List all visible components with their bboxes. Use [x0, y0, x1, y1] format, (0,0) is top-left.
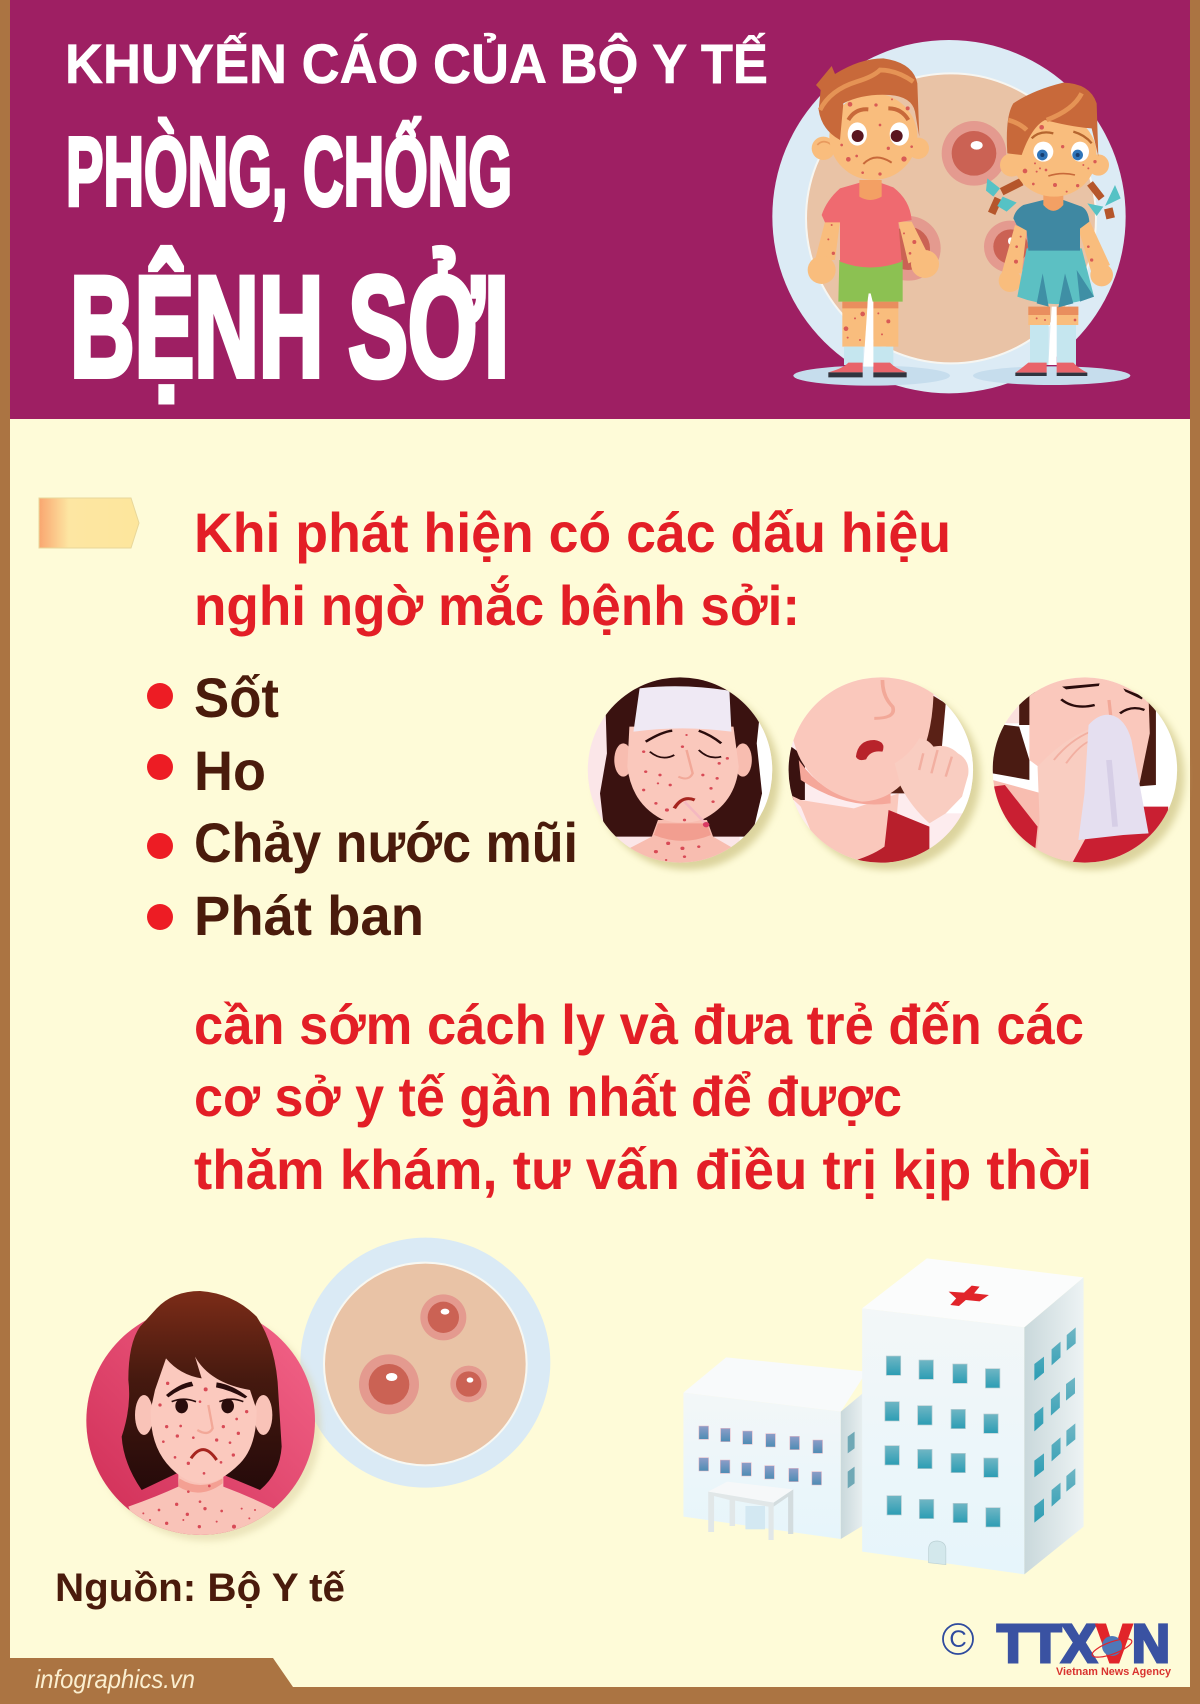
- symptom list: Ho: [194, 739, 266, 802]
- skin close-up: [300, 1238, 550, 1488]
- heading: warning signs: nghi ngờ mắc bệnh sởi:: [194, 574, 800, 637]
- title: PHÒNG, CHỐNG: [66, 117, 512, 226]
- woman portrait: [86, 1291, 321, 1541]
- advice text: cần sớm cách ly và đưa trẻ đến các: [194, 993, 1084, 1056]
- girl: [986, 83, 1121, 376]
- heading: warning signs: [194, 501, 951, 637]
- title: KHUYẾN CÁO CỦA BỘ Y TẾ: [65, 32, 768, 95]
- boy: [808, 58, 939, 377]
- icon: red cross: [949, 1286, 989, 1306]
- title: BỆNH SỞI: [70, 247, 509, 407]
- logo: TTXVN: Vietnam News Agency: [1056, 1666, 1172, 1678]
- source: Nguồn: Bộ Y tế: [55, 1566, 346, 1610]
- website label: infographics.vn: [35, 1664, 195, 1694]
- symptom list: Sốt: [194, 666, 279, 729]
- tall building: [862, 1258, 1084, 1574]
- tag marker: [39, 498, 139, 548]
- advice text: [194, 993, 1092, 1201]
- icon: runny nose: [989, 673, 1184, 870]
- symptom icons: [584, 673, 1184, 870]
- symptom list: [147, 666, 578, 947]
- symptom list: Phát ban: [194, 884, 424, 947]
- illustration: woman with rash and skin close-up: [86, 1238, 550, 1541]
- symptom list: Chảy nước mũi: [194, 811, 578, 874]
- advice text: cơ sở y tế gần nhất để được: [194, 1065, 902, 1128]
- advice text: thăm khám, tư vấn điều trị kịp thời: [194, 1138, 1092, 1201]
- logo: TTXVN: TTXVN: [997, 1614, 1170, 1674]
- illustration: children with measles rash: [772, 40, 1130, 393]
- illustration: hospital: [683, 1258, 1084, 1574]
- header band: [10, 0, 1190, 419]
- icon: fever: [584, 673, 780, 870]
- low building: [683, 1357, 867, 1540]
- brown footer tab: [0, 1658, 1200, 1704]
- logo: TTXVN: C: [949, 1626, 967, 1653]
- icon: cough: [784, 673, 980, 870]
- title: [65, 32, 768, 407]
- heading: warning signs: Khi phát hiện có các dấu hiệu: [194, 501, 951, 564]
